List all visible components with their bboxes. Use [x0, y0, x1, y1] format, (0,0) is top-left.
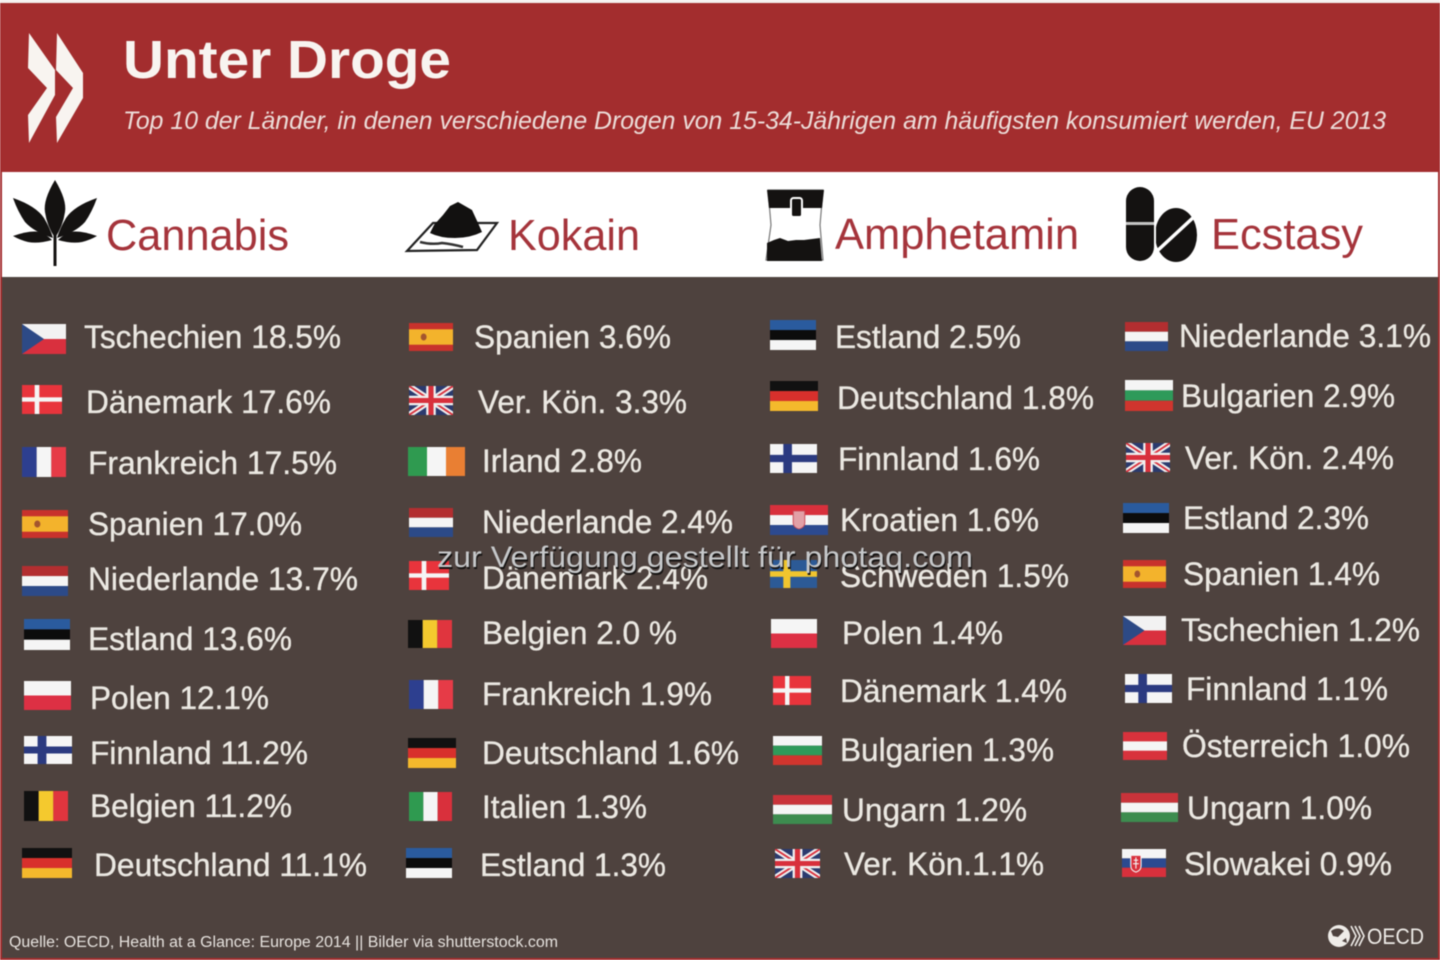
row: Spanien: Spanien 17.0%: [88, 506, 302, 542]
row: Niederlande: Niederlande 2.4%: [482, 504, 733, 540]
row: Ver. Kön.: Ver. Kön. 3.3%: [478, 384, 687, 420]
row: Estland: Estland 2.5%: [835, 319, 1021, 355]
row: Polen: [771, 615, 1003, 651]
drug header band: [2, 172, 1438, 277]
row: Finnland: Finnland 1.6%: [838, 441, 1040, 477]
icon: amphetamine bag: [766, 190, 824, 261]
row: Polen: Polen 1.4%: [842, 615, 1003, 651]
list: Cannabis: [22, 319, 367, 883]
row: Ungarn: Ungarn 1.2%: [842, 792, 1027, 828]
row: Deutschland: Deutschland 1.6%: [482, 735, 739, 771]
list: Ecstasy: [1121, 318, 1431, 882]
row: Österreich: Österreich 1.0%: [1182, 728, 1410, 764]
row: Italien: Italien 1.3%: [482, 789, 647, 825]
icon: cannabis leaf: [13, 180, 97, 266]
row: Dänemark: Dänemark 17.6%: [86, 384, 331, 420]
heading: Amphetamin: Amphetamin: [835, 210, 1079, 259]
row: Schweden: Schweden 1.5%: [840, 558, 1069, 594]
row: Bulgarien: Bulgarien 1.3%: [840, 732, 1054, 768]
row: Deutschland: Deutschland 11.1%: [94, 847, 367, 883]
row: Frankreich: Frankreich 1.9%: [482, 676, 712, 712]
row: Irland: Irland 2.8%: [482, 443, 642, 479]
row: Italien: [409, 789, 647, 825]
row: Niederlande: Niederlande 3.1%: [1179, 318, 1431, 354]
row: Finnland: Finnland 1.1%: [1186, 671, 1388, 707]
row: Dänemark: Dänemark 2.4%: [482, 560, 708, 596]
row: Tschechien: Tschechien 1.2%: [1181, 612, 1420, 648]
row: Irland: [408, 443, 642, 479]
row: Belgien: Belgien 11.2%: [90, 788, 292, 824]
row: Ungarn: Ungarn 1.0%: [1187, 790, 1372, 826]
row: Tschechien: Tschechien 18.5%: [84, 319, 341, 355]
source note: Quelle: OECD, Health at a Glance: Europe 2014 || Bilder via shutterstock.com: [9, 934, 558, 951]
row: Belgien: Belgien 2.0 %: [482, 615, 677, 651]
row: Ver. Kön.: Ver. Kön.1.1%: [844, 846, 1044, 882]
row: Estland: Estland 1.3%: [480, 847, 666, 883]
row: Deutschland: Deutschland 1.8%: [837, 380, 1094, 416]
subtitle: Top 10 der Länder, in denen verschiedene Drogen von 15-34-Jährigen am häufigsten konsumiert werden, EU 2013: [123, 107, 1386, 135]
row: Dänemark: Dänemark 1.4%: [840, 673, 1067, 709]
row: Estland: Estland 13.6%: [88, 621, 292, 657]
icon: ecstasy pills: [1124, 185, 1197, 263]
heading: Cannabis: Cannabis: [106, 211, 289, 260]
row: Niederlande: Niederlande 13.7%: [88, 561, 358, 597]
header banner: [0, 0, 1440, 172]
row: Ver. Kön.: Ver. Kön. 2.4%: [1185, 440, 1394, 476]
row: Spanien: Spanien 1.4%: [1183, 556, 1380, 592]
row: Frankreich: Frankreich 17.5%: [88, 445, 337, 481]
row: Finnland: Finnland 11.2%: [90, 735, 308, 771]
heading: Kokain: Kokain: [508, 211, 640, 260]
icon: OECD logo: [1328, 924, 1424, 949]
row: Slowakei: Slowakei 0.9%: [1184, 846, 1392, 882]
heading: Ecstasy: Ecstasy: [1211, 210, 1363, 259]
icon: OECD logo: OECD: [1367, 924, 1424, 949]
row: Kroatien: Kroatien 1.6%: [840, 502, 1039, 538]
row: Polen: Polen 12.1%: [90, 680, 269, 716]
list: Kokain: [406, 319, 739, 883]
row: Bulgarien: Bulgarien 2.9%: [1181, 378, 1395, 414]
icon: cocaine heap on paper: [407, 202, 497, 251]
row: Estland: Estland 2.3%: [1183, 500, 1369, 536]
watermark: zur Verfügung gestellt für photaq.com: [437, 541, 973, 574]
icon: double chevron logo: [28, 33, 83, 143]
title: Unter Droge: [123, 30, 451, 90]
list: Amphetamin: [770, 319, 1094, 882]
row: Spanien: Spanien 3.6%: [474, 319, 671, 355]
